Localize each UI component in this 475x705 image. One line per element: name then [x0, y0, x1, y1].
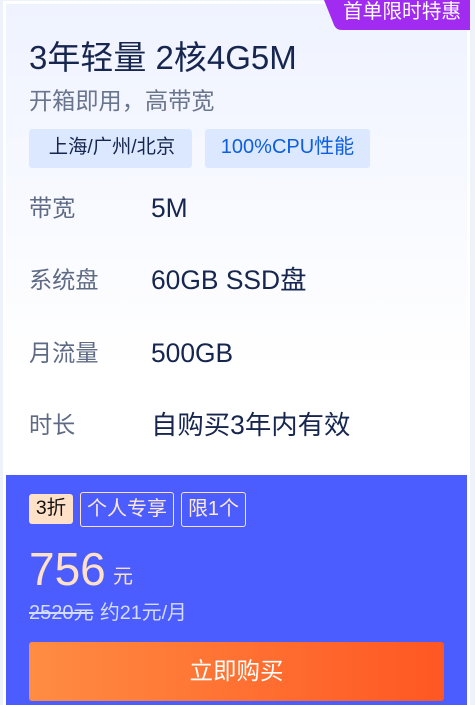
panel: pricing — [6, 475, 467, 705]
subtitle: 开箱即用，高带宽 — [29, 88, 214, 114]
tag: regions — [29, 129, 192, 168]
spec label: monthly traffic: 月流量 — [29, 340, 99, 366]
spec value: monthly traffic: 500GB — [151, 338, 233, 368]
monthly price: 约21元/月 — [100, 602, 187, 624]
original price: 2520元 — [29, 602, 94, 624]
spec value: bandwidth: 5M — [151, 193, 188, 223]
tag: cpu performance: 100%CPU性能 — [221, 136, 354, 158]
badge: first order offer — [324, 0, 470, 30]
spec label: system disk: 系统盘 — [29, 267, 99, 293]
price: 756 — [29, 543, 106, 595]
tag: personal exclusive — [80, 492, 174, 527]
title: 3年轻量 2核4G5M — [29, 39, 297, 76]
tag: cpu performance — [205, 129, 370, 168]
spec label: bandwidth: 带宽 — [29, 195, 75, 221]
panel: product card — [6, 4, 467, 475]
spec value: system disk: 60GB SSD盘 — [151, 265, 306, 295]
tag: regions: 上海/广州/北京 — [49, 137, 175, 158]
spec label: duration: 时长 — [29, 412, 75, 438]
tag: discount — [29, 494, 73, 524]
button: buy now: 立即购买 — [190, 658, 284, 684]
tag: personal exclusive: 个人专享 — [87, 498, 167, 520]
button: buy now — [29, 642, 444, 701]
badge: first order offer: 首单限时特惠 — [343, 1, 461, 23]
tag: discount: 3折 — [36, 497, 66, 519]
price unit: 元 — [113, 566, 133, 588]
tag: limit one: 限1个 — [188, 498, 239, 520]
spec value: duration: 自购买3年内有效 — [151, 410, 350, 440]
tag: limit one — [181, 492, 246, 527]
